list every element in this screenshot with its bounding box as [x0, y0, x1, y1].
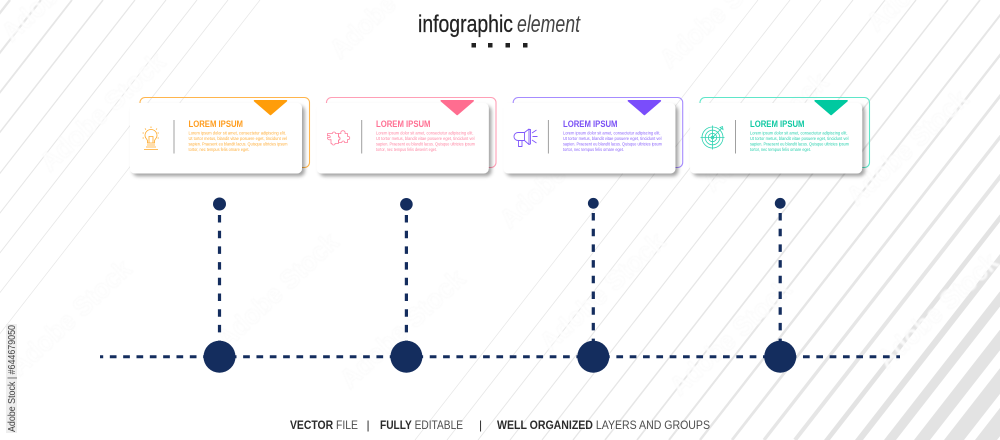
- text: card 2: Lorem ipsum dolor sit amet, consectetur adipiscing elit.: [376, 131, 474, 136]
- text: card 2: Ut tortor metus, blandit vitae posuere eget, tincidunt vel: [376, 136, 474, 141]
- footer text: FULLY EDITABLE: [380, 418, 463, 432]
- footer text: |: [366, 418, 370, 432]
- watermarks: Adobe Stock: [534, 226, 672, 357]
- icon: light bulb: [142, 126, 160, 150]
- text: card 3: Ut tortor metus, blandit vitae posuere eget, tincidunt vel: [563, 136, 662, 141]
- text: card 4: sapien. Praesent eu blandit lacus. Quisque ultricies ipsum: [750, 142, 849, 147]
- text: card 4: LOREM IPSUM: [750, 119, 805, 129]
- title: infographic: [418, 11, 513, 38]
- title dots: [472, 43, 528, 48]
- timeline: horizontal dashed line: [100, 355, 900, 358]
- connector 4: [764, 198, 796, 373]
- text: card 4: tortor, nec tempus felis ornare eget.: [750, 147, 811, 152]
- text: card 3: [563, 119, 662, 152]
- connector 3: [577, 198, 609, 373]
- text: card 1: sapien. Praesent eu blandit lacus. Quisque ultricies ipsum: [188, 142, 288, 147]
- text: card 1: [188, 119, 288, 152]
- watermarks: Adobe Stock: [4, 253, 138, 381]
- panel: card 2 pink: [317, 98, 496, 174]
- text: card 3: sapien. Praesent eu blandit lacus. Quisque ultricies ipsum: [563, 142, 662, 147]
- connector 1: [204, 198, 236, 373]
- footer text: VECTOR FILE: [290, 418, 358, 432]
- panel: card 3 purple: [503, 98, 683, 174]
- text: card 2: sapien. Praesent eu blandit lacus. Quisque ultricies ipsum: [376, 142, 475, 147]
- text: card 4: [750, 119, 849, 152]
- footer text: WELL ORGANIZED LAYERS AND GROUPS: [497, 418, 710, 432]
- stock credit: Adobe Stock | #644679050: [6, 325, 18, 432]
- text: card 4: Ut tortor metus, blandit vitae posuere eget, tincidunt vel: [750, 136, 848, 141]
- text: card 1: Ut tortor metus, blandit vitae posuere eget, tincidunt vel: [188, 136, 287, 141]
- panel: card 1 orange: [130, 98, 310, 174]
- text: card 1: Lorem ipsum dolor sit amet, consectetur adipiscing elit.: [188, 131, 286, 136]
- footer text: |: [479, 418, 482, 432]
- title: element: [517, 11, 581, 38]
- watermarks: Adobe Stock: [494, 106, 628, 234]
- footer text: [290, 418, 710, 432]
- text: card 3: Lorem ipsum dolor sit amet, consectetur adipiscing elit.: [563, 131, 660, 136]
- connector 2: [390, 198, 422, 373]
- text: card 2: LOREM IPSUM: [376, 119, 431, 129]
- icon: target with arrow: [700, 126, 724, 150]
- icon: puzzle pieces: [327, 131, 350, 145]
- text: card 1: LOREM IPSUM: [188, 119, 243, 129]
- watermarks: Adobe Stock: [841, 83, 975, 211]
- icon: megaphone: [514, 129, 538, 146]
- text: card 3: tortor, nec tempus felis ornare eget.: [563, 147, 624, 152]
- watermarks: Adobe Stock: [664, 273, 798, 401]
- watermarks: Adobe Stock: [34, 46, 172, 177]
- watermarks: Adobe Stock: [334, 263, 472, 394]
- panel: card 4 teal: [690, 98, 870, 174]
- text: card 4: Lorem ipsum dolor sit amet, consectetur adipiscing elit.: [750, 131, 848, 136]
- watermarks: Adobe Stock: [697, 66, 835, 197]
- text: card 2: tortor, nec tempus felis deserirt eget.: [376, 147, 437, 152]
- text: card 1: tortor, nec tempus felis ornare eget.: [188, 147, 250, 152]
- text: card 2: [376, 119, 475, 152]
- watermarks: Adobe Stock: [211, 226, 345, 354]
- text: card 3: LOREM IPSUM: [563, 119, 618, 129]
